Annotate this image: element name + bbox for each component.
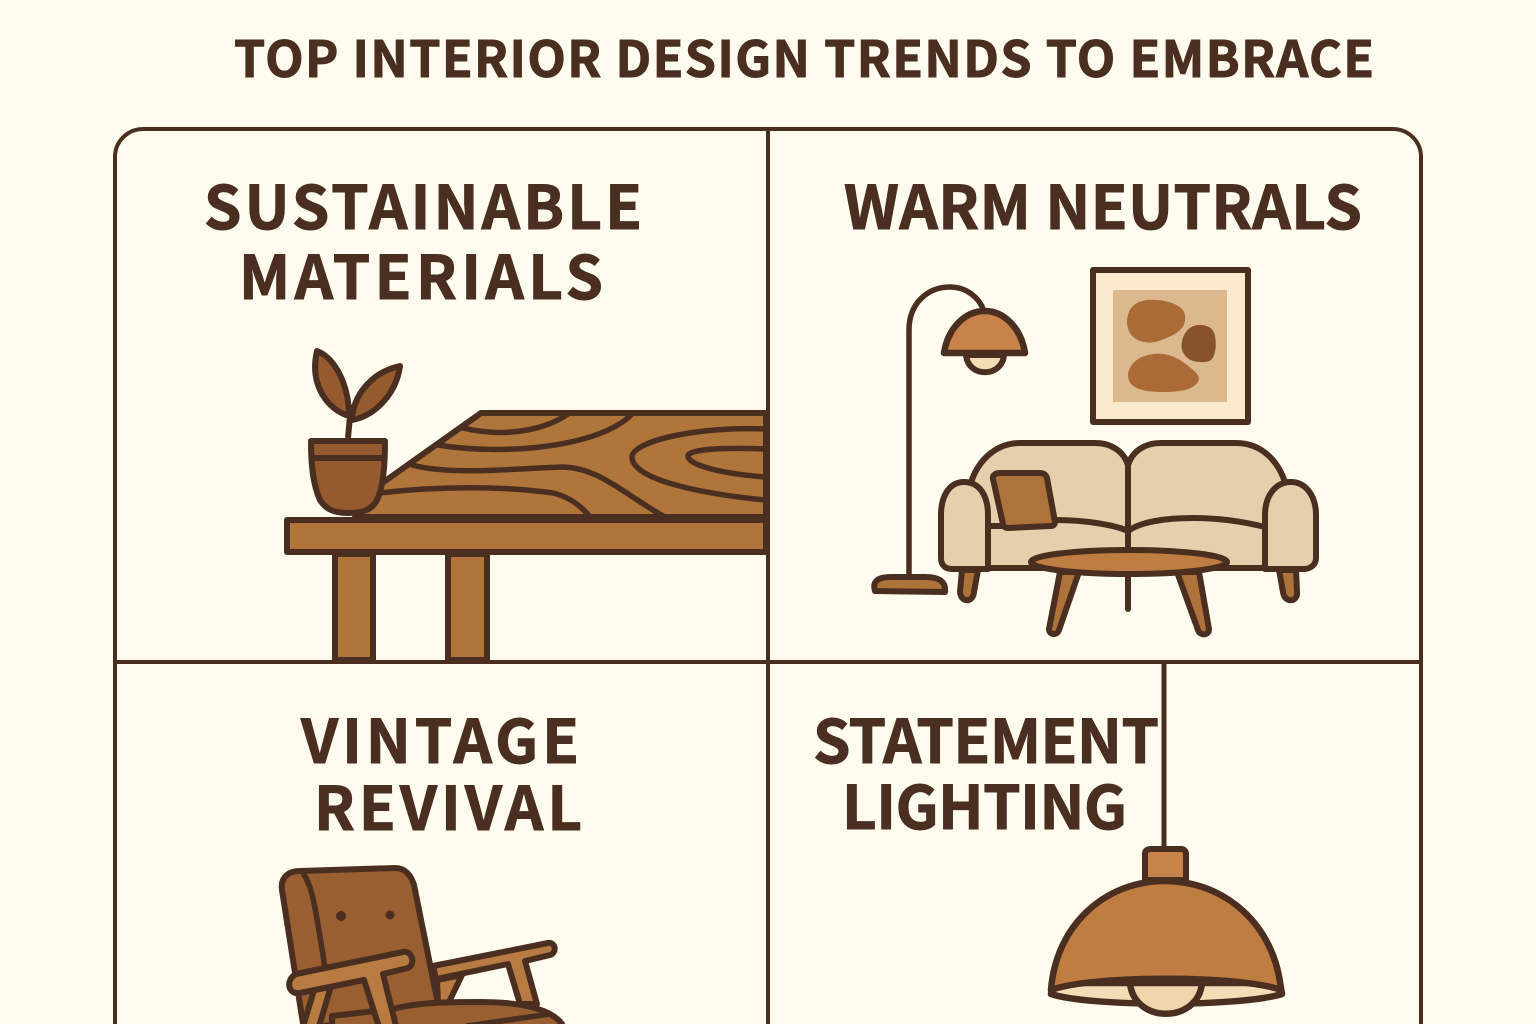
panel: warm neutrals [844,160,1362,634]
heading: vintage revival [300,694,582,848]
title: TOP INTERIOR DESIGN TRENDS TO EMBRACE [234,20,1374,92]
icon: sofa [941,443,1316,600]
panel: statement lighting [813,663,1282,1014]
heading: sustainable materials: MATERIALS [239,230,603,317]
heading: sustainable materials [204,160,642,317]
panel grid [115,129,1421,1024]
heading: vintage revival: VINTAGE [300,694,579,781]
icon: potted plant [311,351,400,513]
icon: floor lamp [874,287,1025,592]
heading: statement lighting: LIGHTING [842,760,1127,847]
heading: sustainable materials: SUSTAINABLE [204,160,642,247]
panel: sustainable materials [204,160,766,660]
icon: wooden table [287,413,766,660]
icon: coffee table [1031,550,1227,634]
icon: framed art [1093,270,1248,422]
heading: warm neutrals: WARM NEUTRALS [844,160,1362,247]
heading: vintage revival: REVIVAL [314,761,582,848]
panel: vintage revival [282,694,582,1024]
icon: armchair [282,868,562,1024]
heading: statement lighting [813,694,1159,847]
icon: pendant lamp [1051,663,1282,1014]
heading: statement lighting: STATEMENT [813,694,1159,781]
